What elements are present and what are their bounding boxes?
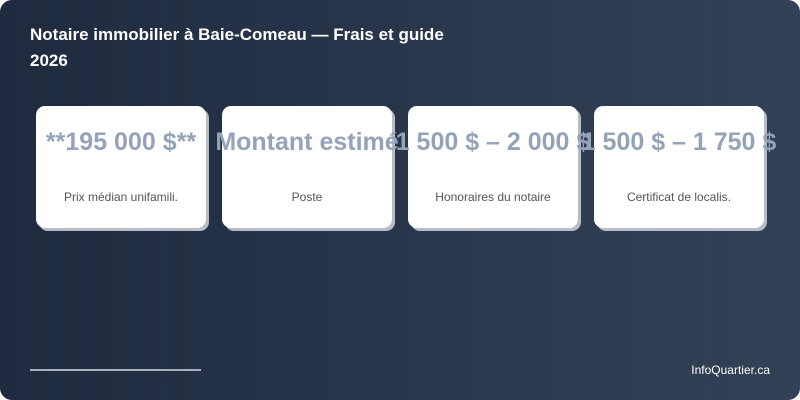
card: poste: Montant estimé: [215, 128, 399, 156]
brand footer: InfoQuartier.ca: [691, 363, 770, 377]
card: honoraires: 1 500 $ – 2 000 $: [396, 128, 590, 156]
card: honoraires: [408, 106, 578, 228]
card: honoraires: Honoraires du notaire: [435, 190, 551, 204]
card: poste: Poste: [292, 190, 322, 204]
card: prix médian: **195 000 $**: [46, 128, 196, 156]
card: poste: [222, 106, 392, 228]
card: prix médian: Prix médian unifamili.: [64, 190, 178, 204]
card: certificat: [594, 106, 764, 228]
card: certificat: Certificat de localis.: [627, 190, 731, 204]
title: Notaire immobilier à Baie-Comeau — Frais et guide 2026: [30, 25, 444, 70]
card: certificat: 1 500 $ – 1 750 $: [582, 128, 776, 156]
card: prix médian: [36, 106, 206, 228]
